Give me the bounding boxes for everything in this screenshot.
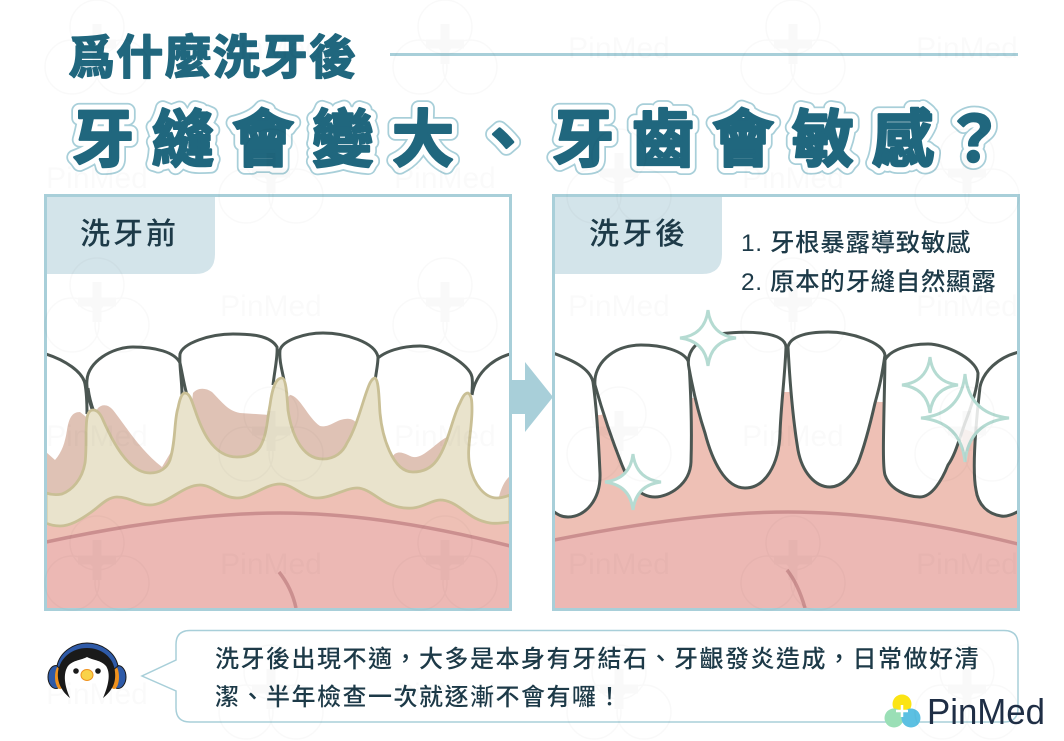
label text: after: 洗牙後 xyxy=(589,218,688,251)
speech bubble xyxy=(142,630,1018,722)
title rule xyxy=(390,53,1018,56)
list of reasons: 原本的牙縫自然顯露 xyxy=(770,268,996,296)
label tab: after xyxy=(555,197,722,274)
panel: after scaling xyxy=(553,196,1019,610)
label text: before: 洗牙前 xyxy=(80,218,179,251)
speech text: 潔、半年檢查一次就逐漸不會有囉！ xyxy=(215,684,623,711)
title: second line with outline: 牙縫會變大、牙齒會敏感？ xyxy=(72,106,1023,175)
plaque xyxy=(46,378,510,526)
logo: PinMed: PinMed xyxy=(927,691,1045,732)
sparkles xyxy=(605,310,1009,510)
speech text xyxy=(215,646,980,711)
gum xyxy=(555,392,1017,542)
panel: before scaling xyxy=(46,196,510,610)
teeth xyxy=(553,332,1019,517)
title: first line: 爲什麼洗牙後 xyxy=(68,31,357,84)
list of reasons xyxy=(741,229,996,296)
arrow between panels xyxy=(511,362,553,432)
illustration: exposed teeth xyxy=(553,332,1019,610)
gum xyxy=(47,485,509,544)
title: second line with outline: 牙縫會變大、牙齒會敏感？ xyxy=(72,106,1023,175)
panel border xyxy=(554,196,1018,610)
stain xyxy=(47,388,509,496)
panel border xyxy=(46,196,510,610)
mascot: penguin with headphones xyxy=(48,643,126,698)
illustration: teeth with plaque xyxy=(46,333,510,610)
title: second line with outline: 牙縫會變大、牙齒會敏感？ xyxy=(72,106,1023,175)
speech text: 洗牙後出現不適，大多是本身有牙結石、牙齦發炎造成，日常做好清 xyxy=(215,646,980,673)
list of reasons: 1. xyxy=(741,230,763,257)
label tab: before xyxy=(47,197,215,274)
list of reasons: 2. xyxy=(741,269,763,296)
list of reasons: 牙根暴露導致敏感 xyxy=(770,229,971,257)
teeth outlines xyxy=(46,333,510,414)
